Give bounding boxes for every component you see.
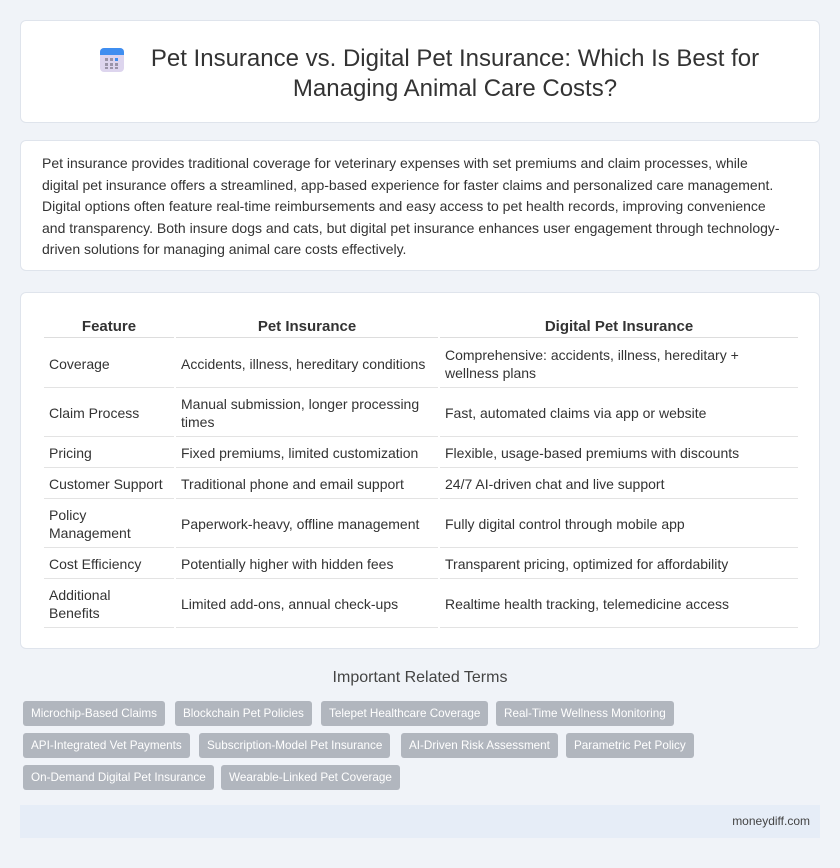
tags: Blockchain Pet Policies — [183, 707, 304, 720]
comparison table card: Additional — [49, 587, 110, 603]
comparison table card: Pet Insurance — [258, 318, 356, 335]
comparison table card: Cost Efficiency — [49, 556, 141, 572]
comparison table card: Coverage — [49, 356, 110, 372]
title: Pet Insurance vs. Digital Pet Insurance: Which Is Best for Managing Animal Care Costs? — [151, 45, 759, 102]
tags: Wearable-Linked Pet Coverage — [229, 771, 392, 784]
icon: calendar — [100, 48, 124, 72]
comparison table card: Realtime health tracking, telemedicine access — [445, 596, 729, 612]
comparison table card: Traditional phone and email support — [181, 476, 404, 492]
comparison table card: Comprehensive: accidents, illness, hereditary + wellness plans — [445, 346, 739, 380]
comparison table card: Fast, automated claims via app or website — [445, 405, 706, 421]
comparison table card: Accidents, illness, hereditary conditions — [181, 356, 425, 372]
tags: Parametric Pet Policy — [574, 739, 686, 752]
comparison table card — [20, 292, 820, 649]
comparison table card: Fully digital control through mobile app — [445, 516, 685, 532]
comparison table card: Customer Support — [49, 476, 163, 492]
comparison table card: Claim Process — [49, 405, 139, 421]
tags: AI-Driven Risk Assessment — [409, 739, 550, 752]
intro text card: Pet insurance provides traditional coverage for veterinary expenses with set premiums and claim processes, while — [42, 155, 748, 171]
comparison table card: Manual submission, longer processing times — [181, 396, 419, 430]
comparison table card: Paperwork-heavy, offline management — [181, 516, 419, 532]
title card — [20, 20, 820, 123]
comparison table card: Digital Pet Insurance — [545, 318, 693, 335]
comparison table card: Limited add-ons, annual check-ups — [181, 596, 398, 612]
tags: API-Integrated Vet Payments — [31, 739, 182, 752]
footer: moneydiff.com — [732, 814, 810, 828]
tags: Subscription-Model Pet Insurance — [207, 739, 382, 752]
comparison table card: Feature — [82, 318, 136, 335]
intro text card: digital pet insurance offers a streamlined, app-based experience for faster claims and personalized care management. — [42, 176, 773, 192]
intro text card: and transparency. Both insure dogs and cats, but digital pet insurance enhances user engagement through technology- — [42, 220, 780, 236]
intro text card: driven solutions for managing animal care costs effectively. — [42, 241, 406, 257]
tags: Telepet Healthcare Coverage — [329, 707, 480, 720]
related terms heading: Important Related Terms — [333, 669, 507, 686]
comparison table card: 24/7 AI-driven chat and live support — [445, 476, 664, 492]
comparison table card: Potentially higher with hidden fees — [181, 556, 393, 572]
intro text card: Digital options often feature real-time reimbursements and easy access to pet health records, improving convenience — [42, 198, 766, 214]
tags — [23, 701, 694, 790]
tags: Real-Time Wellness Monitoring — [504, 707, 666, 720]
comparison table card: Policy — [49, 507, 86, 523]
comparison table card: Benefits — [49, 605, 100, 621]
comparison table card: Transparent pricing, optimized for affordability — [445, 556, 728, 572]
tags: On-Demand Digital Pet Insurance — [31, 771, 206, 784]
comparison table card: Flexible, usage-based premiums with discounts — [445, 445, 739, 461]
comparison table card: Management — [49, 525, 131, 541]
tags: Microchip-Based Claims — [31, 707, 157, 720]
comparison table card: Fixed premiums, limited customization — [181, 445, 418, 461]
comparison table card: Pricing — [49, 445, 92, 461]
intro text card — [20, 140, 820, 271]
footer — [20, 805, 820, 838]
